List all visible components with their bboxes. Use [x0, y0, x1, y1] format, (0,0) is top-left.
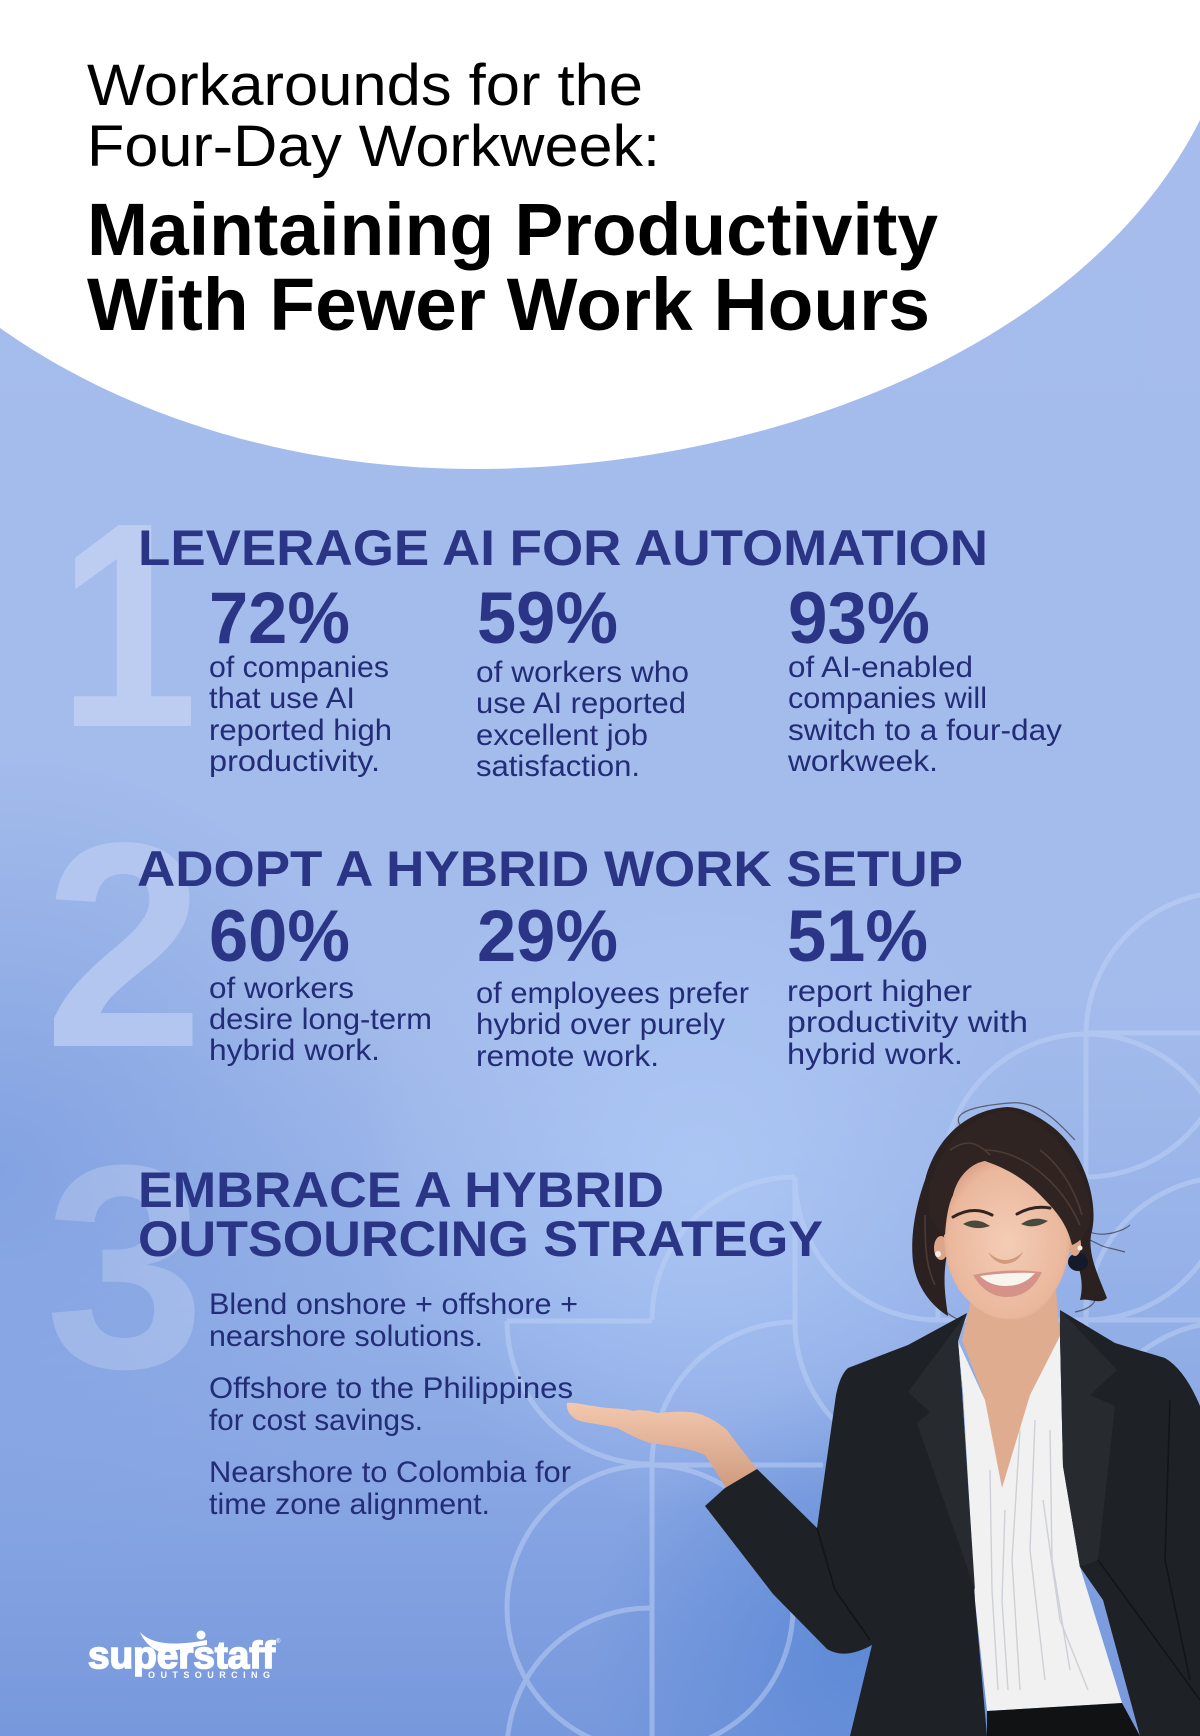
stat: 29%: hybrid over purely: [476, 1008, 725, 1041]
stat: 72%: productivity.: [209, 745, 380, 778]
stat: 60%: [209, 896, 432, 1067]
left lapel: [908, 1313, 975, 1590]
point: Colombia: [209, 1456, 571, 1521]
stat: 59%: use AI reported: [476, 687, 686, 720]
stat: 59%: [476, 578, 689, 783]
stat: 59%: satisfaction.: [476, 750, 640, 783]
logo: superstaff outsourcing: [88, 1630, 281, 1680]
stat: 72%: that use AI: [209, 682, 355, 715]
logo ball: [196, 1630, 206, 1640]
hair back: [912, 1103, 1130, 1320]
stat: 72%: of companies: [209, 651, 389, 684]
neck: [962, 1290, 1062, 1490]
large numeral 1: 1: [58, 462, 198, 788]
heading 3: EMBRACE A HYBRID: [138, 1162, 664, 1218]
stat: 60%: of workers: [209, 972, 354, 1005]
eyes: [963, 1219, 1048, 1228]
stat: 93%: 93%: [788, 578, 930, 659]
logo wordmark: superstaff: [88, 1635, 275, 1677]
stat: 60%: 60%: [209, 896, 350, 977]
stat: 93%: workweek.: [787, 745, 938, 778]
large numeral 2: 2: [44, 782, 204, 1108]
hair highlights: [925, 1143, 1082, 1285]
title: [87, 53, 938, 346]
point: Philippines: for cost savings.: [209, 1404, 423, 1437]
right lapel: [1060, 1310, 1117, 1567]
stat: 72%: 72%: [209, 578, 350, 659]
stat: 60%: desire long-term: [209, 1003, 432, 1036]
nose: [988, 1252, 1023, 1264]
stat: 93%: [787, 578, 1062, 778]
heading 3: [138, 1162, 823, 1267]
blouse: [958, 1336, 1122, 1711]
earrings: [935, 1246, 1082, 1257]
title: Maintaining Productivity: [87, 188, 938, 271]
section 2: hybrid work: [137, 841, 1028, 1073]
stat: 51%: report higher: [787, 975, 972, 1008]
stat: 59%: excellent job: [476, 719, 648, 752]
stat: 93%: companies will: [788, 682, 987, 715]
stat: 72%: [209, 578, 392, 778]
stat: 29%: remote work.: [476, 1040, 659, 1073]
title: With Fewer Work Hours: [87, 263, 930, 346]
stat: 51%: hybrid work.: [787, 1038, 963, 1071]
stat: 59%: 59%: [477, 578, 618, 659]
front hair sweep: [928, 1110, 1090, 1245]
stat: 72%: reported high: [209, 714, 392, 747]
section 3: hybrid outsourcing: [138, 1162, 823, 1521]
stat: 60%: hybrid work.: [209, 1034, 380, 1067]
eyebrows: [953, 1207, 1050, 1217]
white header curve: [0, 0, 1200, 469]
arm and hand: [567, 1403, 758, 1490]
logo tagline: OUTSOURCING: [148, 1670, 270, 1680]
blouse pleats: [990, 1420, 1088, 1690]
point: blend: nearshore solutions.: [209, 1320, 483, 1353]
stat: 51%: 51%: [787, 896, 928, 977]
point: Philippines: Offshore to the Philippines: [209, 1372, 573, 1405]
stat: 93%: of AI-enabled: [788, 651, 973, 684]
ears: [934, 1234, 1081, 1260]
blazer: [705, 1310, 1200, 1736]
section 1: leverage AI: [138, 520, 1062, 783]
stat: 51%: [787, 896, 1028, 1071]
point: blend: Blend onshore + offshore +: [209, 1288, 578, 1321]
point: Colombia: time zone alignment.: [209, 1488, 490, 1521]
stat: 29%: of employees prefer: [476, 977, 749, 1010]
face: [944, 1160, 1070, 1319]
heading 1: LEVERAGE AI FOR AUTOMATION: [138, 520, 988, 576]
point: blend: [209, 1288, 578, 1353]
stat: 93%: switch to a four-day: [788, 714, 1062, 747]
point: Colombia: Nearshore to Colombia for: [209, 1456, 571, 1489]
stat: 29%: [476, 896, 749, 1073]
stat: 59%: of workers who: [476, 656, 689, 689]
decorative geometric line pattern: [507, 892, 1200, 1736]
smile: [973, 1271, 1042, 1297]
title: Workarounds for the: [87, 53, 643, 118]
point: Philippines: [209, 1372, 573, 1437]
blazer seams: [817, 1400, 1200, 1700]
heading 2: ADOPT A HYBRID WORK SETUP: [137, 841, 963, 897]
logo swoosh: [140, 1632, 207, 1652]
pants: [987, 1703, 1140, 1736]
logo registered mark: ®: [276, 1638, 281, 1645]
stat: 51%: productivity with: [787, 1006, 1028, 1039]
large numeral 3: 3: [45, 1105, 205, 1429]
stat: 29%: 29%: [477, 896, 618, 977]
photo: smiling woman presenting: [567, 1103, 1200, 1736]
title: Four-Day Workweek:: [87, 114, 660, 179]
heading 3: OUTSOURCING STRATEGY: [138, 1211, 823, 1267]
